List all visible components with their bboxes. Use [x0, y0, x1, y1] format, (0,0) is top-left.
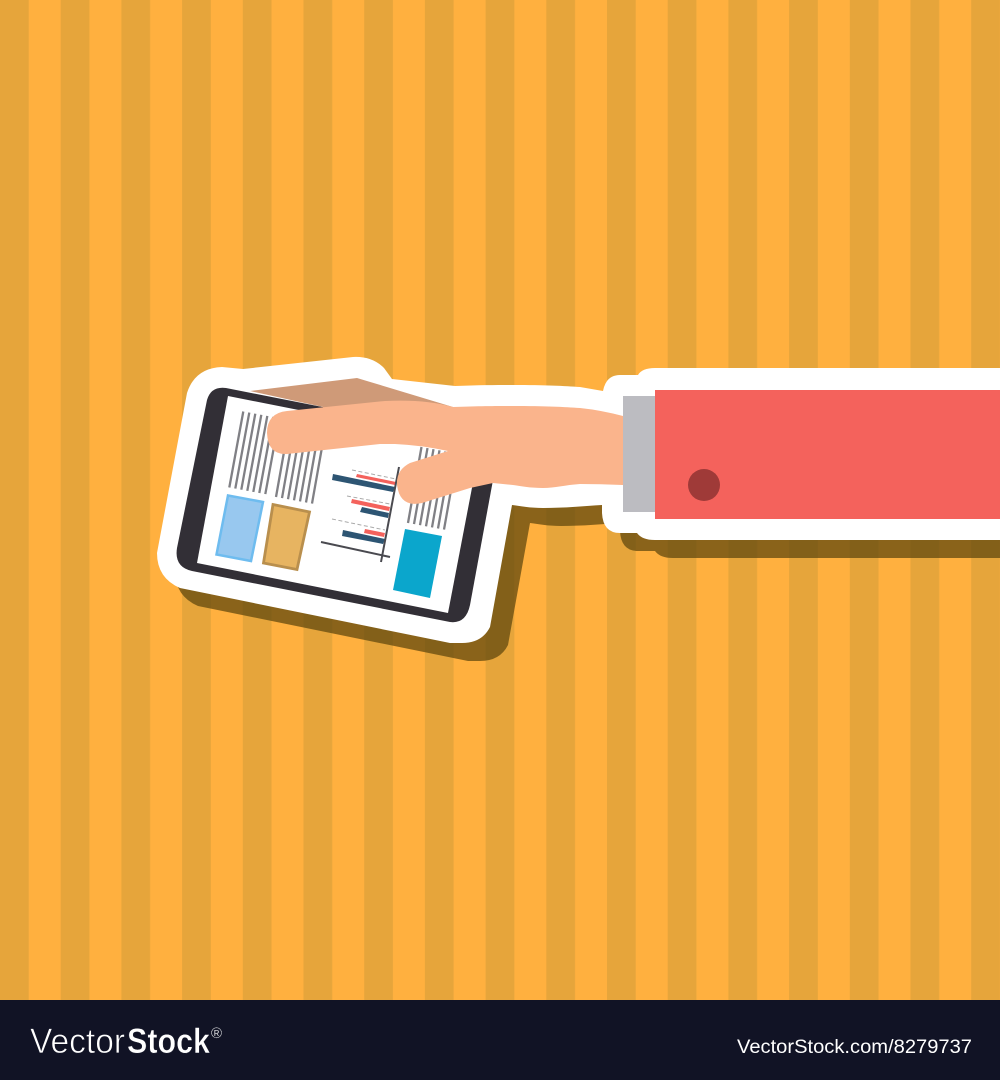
- text column two: [276, 421, 326, 504]
- tablet screen: [197, 396, 480, 613]
- red sleeve: [655, 390, 1000, 519]
- VectorStock logo: Vector: [30, 1022, 125, 1061]
- navy bars: [332, 474, 395, 544]
- text column three: [408, 447, 458, 530]
- bar chart: [321, 467, 399, 562]
- hand: [250, 378, 623, 504]
- back of hand: [250, 378, 453, 420]
- white sticker outline: [157, 357, 1000, 643]
- tablet device: [177, 388, 500, 622]
- chart axes: [321, 467, 399, 562]
- teal card: [393, 529, 442, 598]
- red bars: [351, 474, 396, 537]
- fingers and palm: [267, 401, 623, 504]
- VectorStock logo: ®: [211, 1025, 222, 1042]
- footer bar: [0, 1000, 1000, 1080]
- dashed guide lines: [332, 470, 396, 530]
- sleeve button: [688, 469, 720, 501]
- text column one: [229, 412, 279, 494]
- sticker drop shadow: [175, 375, 1000, 661]
- sleeve: [623, 390, 1000, 519]
- tablet body: [177, 388, 500, 622]
- blue card: [216, 496, 263, 561]
- footer background: [0, 1000, 1000, 1080]
- VectorStock logo: Stock: [127, 1022, 210, 1061]
- image ID text: VectorStock.com/8279737: [737, 1036, 972, 1058]
- tan card: [264, 504, 310, 570]
- shirt cuff: [623, 396, 655, 512]
- VectorStock logo: [30, 1022, 222, 1061]
